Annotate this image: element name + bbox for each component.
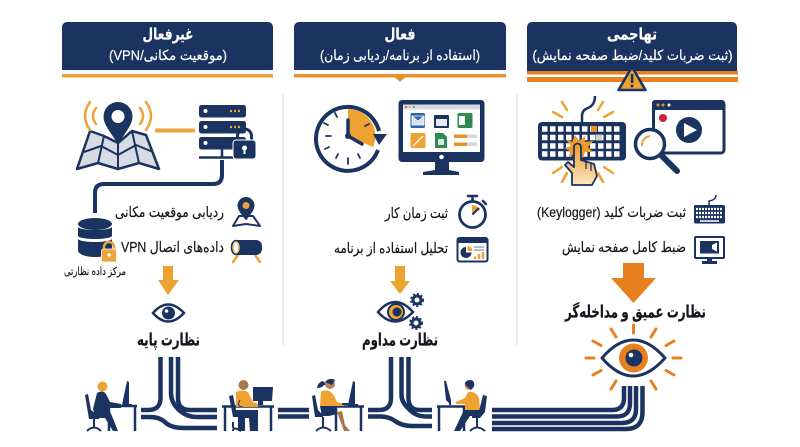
icon: stopwatch <box>460 196 486 228</box>
label: basic monitoring: نظارت پایه <box>137 330 200 350</box>
label: deep intrusive monitoring: نظارت عمیق و مداخله‌گر <box>564 302 706 322</box>
heading: passive: غیرفعال <box>142 26 194 44</box>
icon: eye with gears <box>378 294 423 329</box>
panel: active <box>294 22 506 350</box>
text: VPN data: داده‌های اتصال VPN <box>121 240 224 256</box>
heading: aggressive <box>527 22 738 82</box>
panel: aggressive <box>527 22 738 389</box>
text: keylogger: ثبت ضربات کلید (Keylogger) <box>537 204 686 221</box>
label: monitoring data center: مرکز داده نظارتی <box>64 266 126 278</box>
text: location tracking: ردیابی موقعیت مکانی <box>115 205 224 221</box>
icon: locked server <box>199 105 256 159</box>
person 3 at desk <box>312 379 364 431</box>
text: work time logging: ثبت زمان کار <box>384 206 448 222</box>
icon: map with location pin <box>77 102 159 169</box>
heading: active: فعال <box>384 26 416 44</box>
icon: app usage window <box>458 238 488 262</box>
heading: passive: (موقعیت مکانی/VPN) <box>109 47 227 64</box>
arrow <box>611 263 656 303</box>
icon: clock <box>316 107 387 171</box>
heading: aggressive: (ثبت ضربات کلید/ضبط صفحه نمایش) <box>532 47 732 64</box>
workflow lines <box>141 357 642 429</box>
text: full screen recording: ضبط کامل صفحه نمایش <box>562 240 686 256</box>
text: app usage analysis: تحلیل استفاده از برنامه <box>334 241 448 257</box>
person 2 at desk <box>222 380 274 431</box>
icon: location pin small <box>233 197 260 226</box>
heading: active <box>294 22 506 82</box>
person 4 at desk <box>437 380 487 431</box>
icon: screen recorder monitor <box>695 237 724 264</box>
icon: screen recording window and magnifier <box>636 100 725 171</box>
heading: passive <box>62 22 273 78</box>
arrow <box>158 266 179 295</box>
icon: monitor with apps <box>398 100 484 175</box>
heading: aggressive: تهاجمی <box>607 26 657 44</box>
heading: active: (استفاده از برنامه/ردیابی زمان) <box>320 47 480 64</box>
icon: eye with rays <box>586 325 681 389</box>
icon: keyboard small <box>694 195 725 224</box>
icon: eye <box>153 304 184 322</box>
panel: passive <box>62 22 273 350</box>
label: continuous monitoring: نظارت مداوم <box>362 330 438 350</box>
connector: map to server <box>155 128 195 132</box>
icon: VPN tunnel <box>231 240 262 262</box>
arrow <box>390 266 410 294</box>
icon: database <box>78 218 116 262</box>
person 1 at desk <box>85 381 137 431</box>
icon: keyboard with pressing hand <box>538 96 626 185</box>
icon: warning triangle <box>618 67 646 90</box>
connector: server to database <box>95 160 222 213</box>
